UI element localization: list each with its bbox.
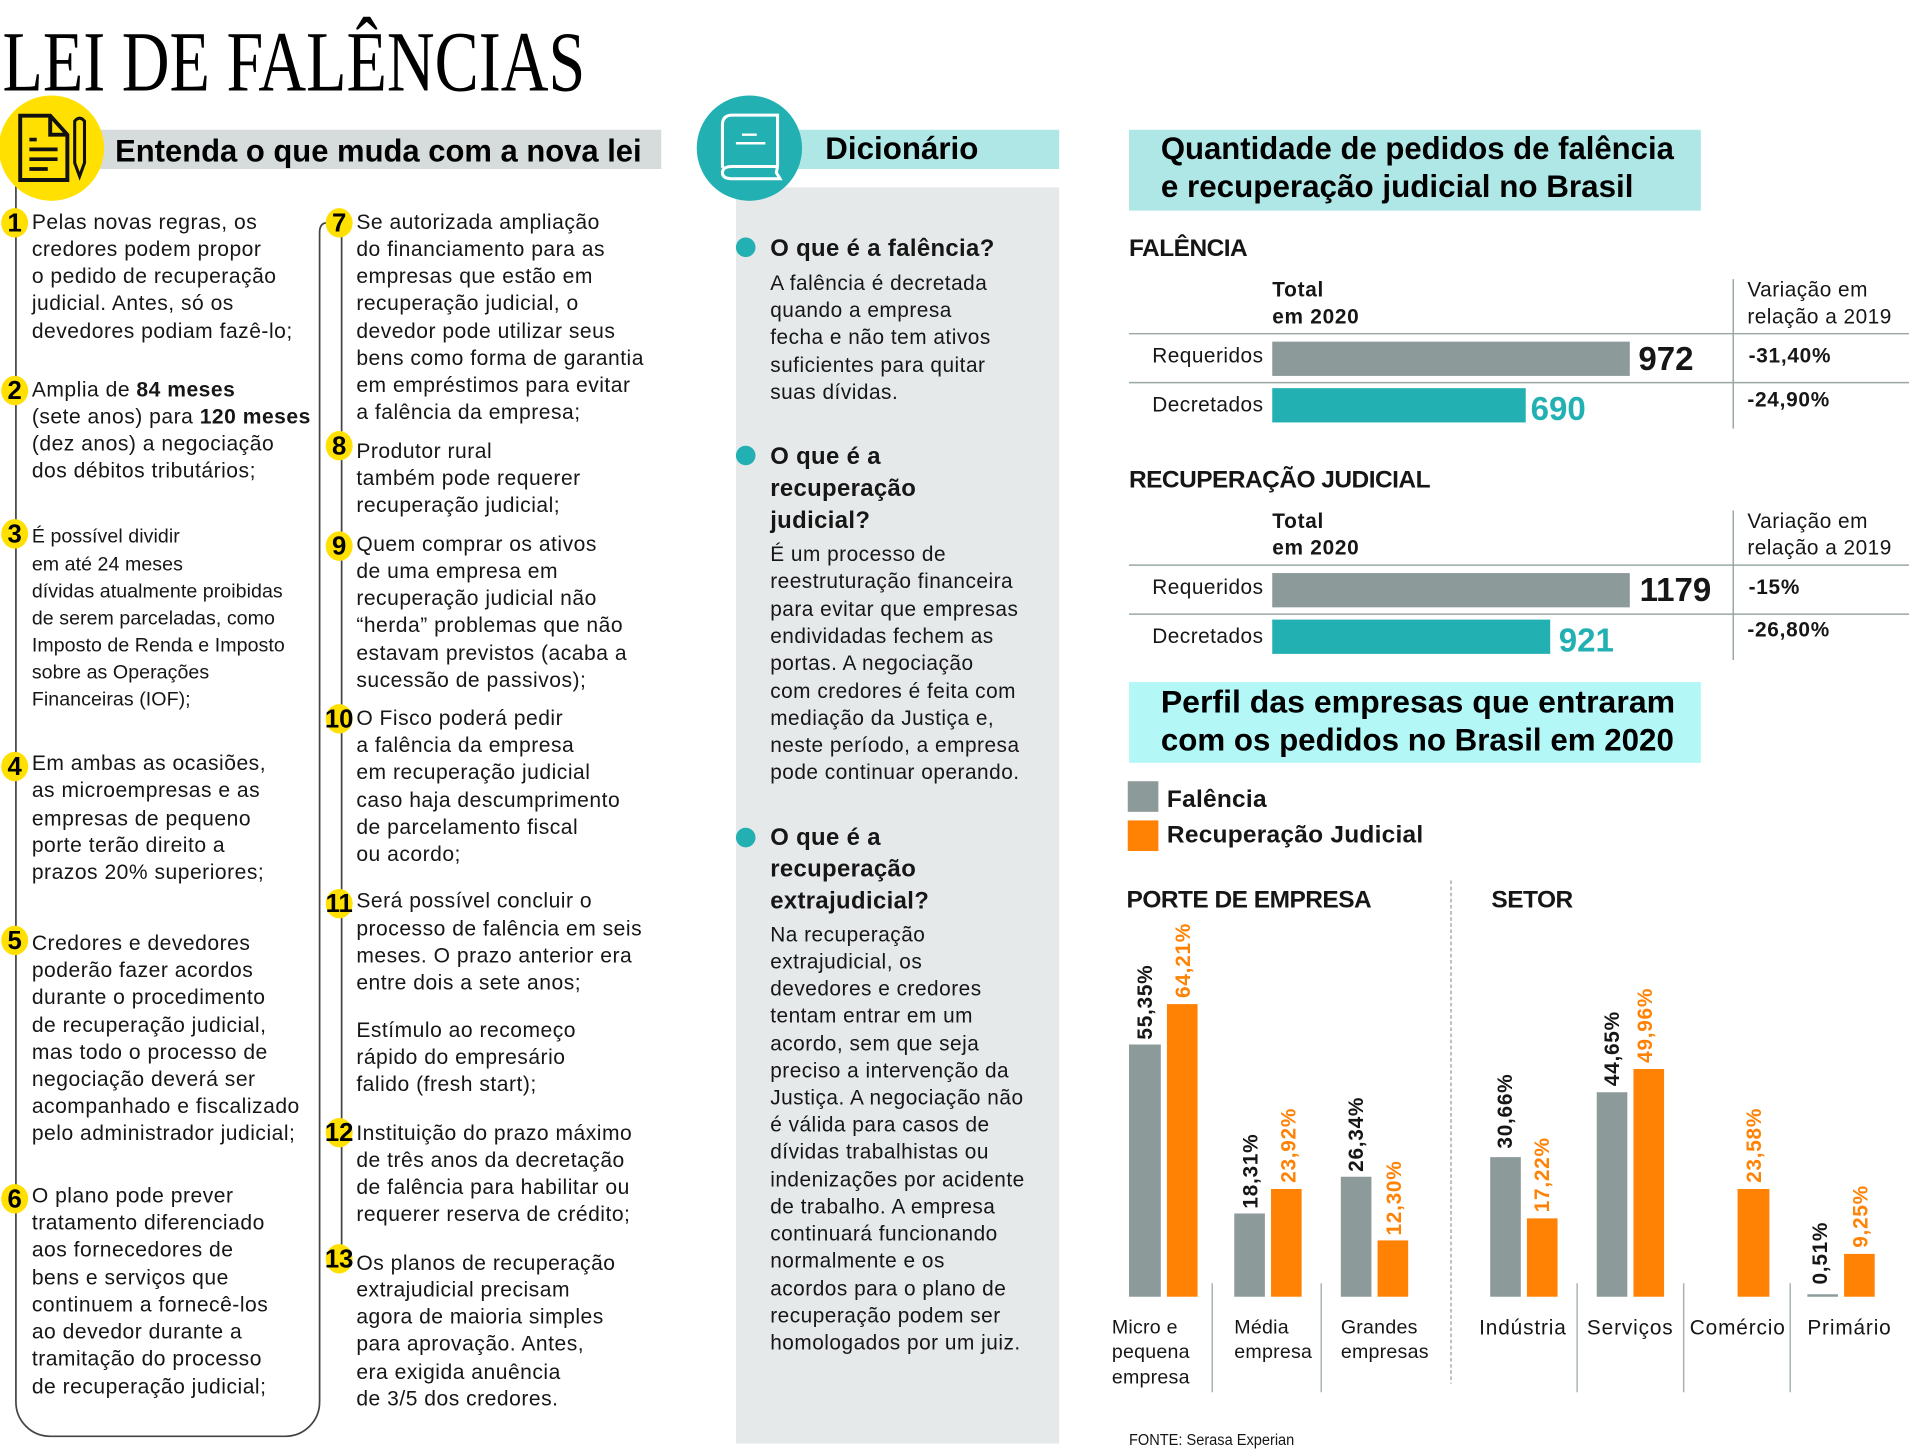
- table: falência: Total: [1272, 278, 1324, 301]
- heading bar: profile: com os pedidos no Brasil em 2020: [1161, 723, 1674, 758]
- separators: [1212, 1283, 1790, 1392]
- icon: book: [697, 96, 802, 201]
- definition: recuperação judicial: judicial?: [769, 507, 870, 534]
- item 4: [1, 752, 266, 884]
- item 6: [1, 1184, 268, 1398]
- item 12: requerer reserva de crédito;: [356, 1203, 630, 1226]
- panel: dictionary: [697, 96, 1059, 1444]
- chart: setor: Primário: [1807, 1317, 1892, 1340]
- chart: porte de empresa: empresa: [1234, 1341, 1312, 1363]
- item 9: “herda” problemas que não: [356, 614, 623, 637]
- definition: recuperação judicial: reestruturação financeira: [770, 570, 1013, 593]
- table: recuperação judicial: em 2020: [1272, 537, 1359, 560]
- heading bar: quantity: [1129, 130, 1701, 211]
- definition: recuperação extrajudicial: preciso a intervenção da: [770, 1060, 1009, 1083]
- definition: recuperação extrajudicial: O que é a: [770, 824, 881, 851]
- item 10: em recuperação judicial: [356, 761, 590, 784]
- item 1: [1, 208, 293, 343]
- table: falência: 972: [1638, 341, 1694, 378]
- item 3: Financeiras (IOF);: [32, 688, 191, 710]
- item 6: tramitação do processo: [32, 1347, 262, 1370]
- item 7: [326, 208, 644, 424]
- definition: falência: suficientes para quitar: [770, 354, 986, 377]
- item 7: Se autorizada ampliação: [356, 211, 600, 234]
- item 1: devedores podiam fazê-lo;: [32, 320, 293, 343]
- definition: recuperação extrajudicial: Na recuperação: [770, 924, 925, 947]
- table: falência: 690: [1531, 391, 1586, 428]
- item 5: 5: [8, 927, 22, 955]
- definition: recuperação extrajudicial: normalmente e os: [770, 1249, 945, 1272]
- table: falência: Variação em: [1747, 278, 1868, 301]
- item 4: porte terão direito a: [32, 834, 225, 857]
- item 12: Instituição do prazo máximo: [356, 1122, 632, 1145]
- panel: changes in the new law: [0, 96, 661, 1436]
- fresh start text: falido (fresh start);: [356, 1073, 537, 1096]
- chart: porte de empresa: Micro e: [1112, 1316, 1178, 1338]
- item 8: 8: [332, 432, 346, 460]
- item 8: também pode requerer: [356, 467, 581, 490]
- definition: recuperação judicial: [736, 443, 1020, 784]
- item 12: de três anos da decretação: [356, 1149, 625, 1172]
- item 10: de parcelamento fiscal: [356, 816, 578, 839]
- item 9: Quem comprar os ativos: [356, 533, 597, 556]
- fresh start text: Estímulo ao recomeço: [356, 1019, 576, 1042]
- definition: recuperação judicial: neste período, a empresa: [770, 734, 1020, 757]
- definition: falência: suas dívidas.: [770, 381, 898, 404]
- chart: setor: 17,22%: [1531, 1137, 1554, 1212]
- definition: recuperação judicial: É um processo de: [770, 543, 946, 566]
- definition: recuperação judicial: endividadas fechem as: [770, 625, 994, 648]
- dictionary background: [736, 187, 1059, 1444]
- icon: document and pencil: [0, 96, 104, 201]
- item 3: sobre as Operações: [32, 661, 209, 683]
- item 9: de uma empresa em: [356, 560, 558, 583]
- connector line: [16, 184, 342, 1436]
- definition: recuperação judicial: com credores é feita com: [770, 680, 1016, 703]
- item 7: recuperação judicial, o: [356, 292, 579, 315]
- chart: porte de empresa: Grandes: [1341, 1316, 1418, 1338]
- definition: recuperação extrajudicial: tentam entrar em um: [770, 1004, 973, 1027]
- item 8: Produtor rural: [356, 440, 492, 463]
- item 13: agora de maioria simples: [356, 1306, 604, 1329]
- chart: porte de empresa: empresa: [1112, 1367, 1190, 1389]
- item 11: [326, 889, 642, 994]
- item 7: devedor pode utilizar seus: [356, 320, 615, 343]
- item 9: sucessão de passivos);: [356, 669, 586, 692]
- item 12: [325, 1118, 632, 1226]
- item 4: as microempresas e as: [32, 779, 260, 802]
- item 5: de recuperação judicial,: [32, 1014, 266, 1037]
- chart: porte de empresa: [1112, 886, 1429, 1389]
- definition: recuperação extrajudicial: [736, 824, 1025, 1354]
- chart: porte de empresa: 64,21%: [1172, 923, 1195, 998]
- definition: falência: O que é a falência?: [770, 235, 995, 262]
- item 9: estavam previstos (acaba a: [356, 642, 627, 665]
- item 4: empresas de pequeno: [32, 807, 251, 830]
- table: falência: -24,90%: [1747, 389, 1830, 412]
- item 1: Pelas novas regras, os: [32, 211, 257, 234]
- definition: falência: [736, 235, 995, 404]
- definition: recuperação extrajudicial: recuperação: [770, 856, 916, 883]
- item 6: tratamento diferenciado: [32, 1211, 265, 1234]
- table: recuperação judicial: -26,80%: [1747, 619, 1830, 642]
- title: LEI DE FALÊNCIAS: [2, 15, 585, 110]
- item 13: [325, 1244, 616, 1411]
- table: recuperação judicial: [1129, 465, 1909, 660]
- item 11: entre dois a sete anos;: [356, 971, 581, 994]
- chart: setor: Serviços: [1587, 1317, 1674, 1340]
- item 7: 7: [332, 209, 346, 237]
- chart: porte de empresa: Média: [1234, 1316, 1289, 1338]
- definition: recuperação extrajudicial: indenizações por acidente: [770, 1169, 1025, 1192]
- item 5: mas todo o processo de: [32, 1041, 268, 1064]
- definition: recuperação judicial: pode continuar operando.: [770, 761, 1020, 784]
- item 7: bens como forma de garantia: [356, 347, 644, 370]
- item 10: O Fisco poderá pedir: [356, 707, 563, 730]
- item 1: o pedido de recuperação: [32, 265, 277, 288]
- item 11: Será possível concluir o: [356, 889, 592, 912]
- chart: setor: 30,66%: [1494, 1074, 1517, 1149]
- item 6: O plano pode prever: [32, 1184, 234, 1207]
- item 5: durante o procedimento: [32, 986, 265, 1009]
- table: recuperação judicial: Variação em: [1747, 510, 1868, 533]
- item 2: [1, 376, 311, 483]
- table: recuperação judicial: Total: [1272, 510, 1324, 533]
- definition: recuperação extrajudicial: continuará funcionando: [770, 1222, 998, 1245]
- table: recuperação judicial: Decretados: [1152, 625, 1263, 648]
- item 11: 11: [326, 890, 353, 918]
- heading bar: changes: Entenda o que muda com a nova lei: [115, 134, 642, 169]
- item 2: (dez anos) a negociação: [32, 433, 274, 456]
- chart: porte de empresa: empresas: [1341, 1341, 1429, 1363]
- table: falência: Requeridos: [1152, 344, 1264, 367]
- legend: Recuperação Judicial: [1167, 821, 1423, 848]
- legend: Falência: [1167, 786, 1267, 813]
- heading bar: quantity: Quantidade de pedidos de falência: [1161, 131, 1675, 166]
- heading bar: dictionary: [771, 130, 1059, 169]
- item 10: a falência da empresa: [356, 734, 574, 757]
- table: recuperação judicial: Requeridos: [1152, 576, 1264, 599]
- definition: recuperação extrajudicial: acordos para o plano de: [770, 1278, 1006, 1301]
- panel: company profile: [1112, 682, 1892, 1449]
- item 9: 9: [332, 533, 346, 561]
- definition: recuperação extrajudicial: extrajudicial?: [770, 888, 929, 915]
- panel: quantity of requests: [1129, 130, 1909, 660]
- item 2: 2: [8, 377, 22, 405]
- item 9: [326, 531, 627, 692]
- item 6: bens e serviços que: [32, 1266, 229, 1289]
- item 7: em empréstimos para evitar: [356, 374, 631, 397]
- table: recuperação judicial: -15%: [1749, 576, 1800, 599]
- chart: setor: 9,25%: [1849, 1185, 1872, 1248]
- chart: porte de empresa: pequena: [1112, 1341, 1190, 1363]
- definition: recuperação judicial: portas. A negociação: [770, 652, 974, 675]
- item 3: Imposto de Renda e Imposto: [32, 634, 285, 656]
- item 6: 6: [8, 1185, 22, 1213]
- item 12: 12: [325, 1119, 353, 1147]
- chart: setor: SETOR: [1491, 886, 1574, 913]
- chart: porte de empresa: PORTE DE EMPRESA: [1127, 886, 1372, 913]
- item 5: pelo administrador judicial;: [32, 1122, 295, 1145]
- table: recuperação judicial: 1179: [1640, 572, 1711, 609]
- table: recuperação judicial: 921: [1559, 622, 1614, 659]
- definition: recuperação judicial: mediação da Justiça e,: [770, 707, 994, 730]
- item 5: Credores e devedores: [32, 932, 250, 955]
- chart: setor: 44,65%: [1601, 1011, 1624, 1086]
- item 6: continuem a fornecê-los: [32, 1293, 268, 1316]
- item 13: para aprovação. Antes,: [356, 1333, 584, 1356]
- item 6: ao devedor durante a: [32, 1320, 242, 1343]
- item 5: acompanhado e fiscalizado: [32, 1095, 300, 1118]
- heading bar: profile: Perfil das empresas que entraram: [1161, 685, 1675, 720]
- definition: recuperação extrajudicial: devedores e credores: [770, 978, 982, 1001]
- item 3: de serem parceladas, como: [32, 607, 275, 629]
- item 2: (sete anos) para 120 meses: [32, 406, 311, 429]
- item 1: judicial. Antes, só os: [31, 292, 234, 315]
- definition: recuperação judicial: O que é a: [770, 443, 881, 470]
- heading bar: quantity: e recuperação judicial no Brasil: [1161, 169, 1633, 204]
- item 4: Em ambas as ocasiões,: [32, 752, 266, 775]
- table: falência: em 2020: [1272, 305, 1359, 328]
- heading bar: profile: [1129, 682, 1701, 763]
- item 3: É possível dividir: [32, 524, 180, 547]
- item 4: 4: [8, 753, 23, 781]
- chart: porte de empresa: 18,31%: [1240, 1134, 1263, 1209]
- chart: setor: Indústria: [1479, 1317, 1567, 1340]
- item 10: 10: [325, 705, 353, 733]
- chart: porte de empresa: 12,30%: [1383, 1161, 1406, 1236]
- definition: recuperação extrajudicial: homologados por um juiz.: [770, 1331, 1021, 1354]
- chart: porte de empresa: 23,92%: [1278, 1108, 1301, 1183]
- item 13: extrajudicial precisam: [356, 1279, 570, 1302]
- divider: [1450, 880, 1452, 1384]
- source: FONTE: Serasa Experian: [1129, 1432, 1294, 1449]
- definition: recuperação extrajudicial: extrajudicial, os: [770, 951, 922, 974]
- item 3: em até 24 meses: [32, 554, 183, 576]
- item 13: 13: [325, 1245, 353, 1273]
- table: recuperação judicial: RECUPERAÇÃO JUDICIAL: [1129, 465, 1431, 493]
- table: falência: Decretados: [1152, 393, 1263, 416]
- definition: falência: A falência é decretada: [770, 272, 987, 295]
- definition: recuperação extrajudicial: dívidas trabalhistas ou: [770, 1140, 989, 1163]
- item 8: [326, 431, 581, 517]
- item 8: recuperação judicial;: [356, 494, 560, 517]
- item 13: Os planos de recuperação: [356, 1252, 616, 1275]
- item 1: credores podem propor: [32, 238, 261, 261]
- table: falência: [1129, 234, 1909, 429]
- definition: falência: fecha e não tem ativos: [770, 326, 991, 349]
- item 6: de recuperação judicial;: [32, 1375, 266, 1398]
- definition: recuperação extrajudicial: de trabalho. A empresa: [770, 1195, 995, 1218]
- item 2: Amplia de 84 meses: [32, 379, 235, 402]
- item 3: [1, 519, 285, 710]
- heading bar: dictionary: Dicionário: [825, 131, 978, 166]
- item 6: aos fornecedores de: [32, 1238, 234, 1261]
- chart: porte de empresa: 26,34%: [1345, 1097, 1368, 1172]
- item 3: 3: [8, 520, 22, 548]
- item 11: processo de falência em seis: [356, 918, 642, 941]
- table: falência: relação a 2019: [1747, 305, 1892, 328]
- item 7: empresas que estão em: [356, 265, 593, 288]
- item 1: 1: [8, 209, 22, 237]
- fresh start text: rápido do empresário: [356, 1046, 566, 1069]
- item 12: de falência para habilitar ou: [356, 1176, 630, 1199]
- chart: setor: 23,58%: [1743, 1108, 1766, 1183]
- definition: recuperação extrajudicial: é válida para casos de: [770, 1113, 990, 1136]
- definition: recuperação extrajudicial: acordo, sem que seja: [770, 1033, 979, 1056]
- item 2: dos débitos tributários;: [32, 460, 256, 483]
- chart: porte de empresa: 55,35%: [1134, 965, 1157, 1040]
- item 5: [1, 926, 300, 1145]
- definition: recuperação extrajudicial: Justiça. A negociação não: [770, 1086, 1024, 1109]
- item 11: meses. O prazo anterior era: [356, 944, 632, 967]
- item 10: ou acordo;: [356, 843, 461, 866]
- chart: setor: Comércio: [1690, 1317, 1786, 1340]
- definition: recuperação judicial: para evitar que empresas: [770, 598, 1018, 621]
- table: recuperação judicial: relação a 2019: [1747, 537, 1892, 560]
- item 5: negociação deverá ser: [32, 1068, 256, 1091]
- definition: recuperação judicial: recuperação: [770, 475, 916, 502]
- item 9: recuperação judicial não: [356, 587, 597, 610]
- item 10: caso haja descumprimento: [356, 789, 620, 812]
- chart: setor: [1479, 886, 1892, 1340]
- chart: setor: 49,96%: [1634, 988, 1657, 1063]
- item 4: prazos 20% superiores;: [32, 861, 264, 884]
- item 3: dívidas atualmente proibidas: [32, 581, 283, 603]
- table: falência: -31,40%: [1749, 344, 1831, 367]
- table: falência: FALÊNCIA: [1129, 234, 1248, 262]
- definition: falência: quando a empresa: [770, 299, 952, 322]
- item 7: do financiamento para as: [356, 238, 605, 261]
- item 5: poderão fazer acordos: [32, 959, 253, 982]
- chart: setor: 0,51%: [1809, 1222, 1832, 1284]
- item 13: era exigida anuência: [356, 1361, 561, 1384]
- item 13: de 3/5 dos credores.: [356, 1388, 559, 1411]
- legend: [1128, 781, 1423, 851]
- definition: recuperação extrajudicial: recuperação podem ser: [770, 1304, 1001, 1327]
- item 10: [325, 704, 620, 866]
- item 7: a falência da empresa;: [356, 401, 581, 424]
